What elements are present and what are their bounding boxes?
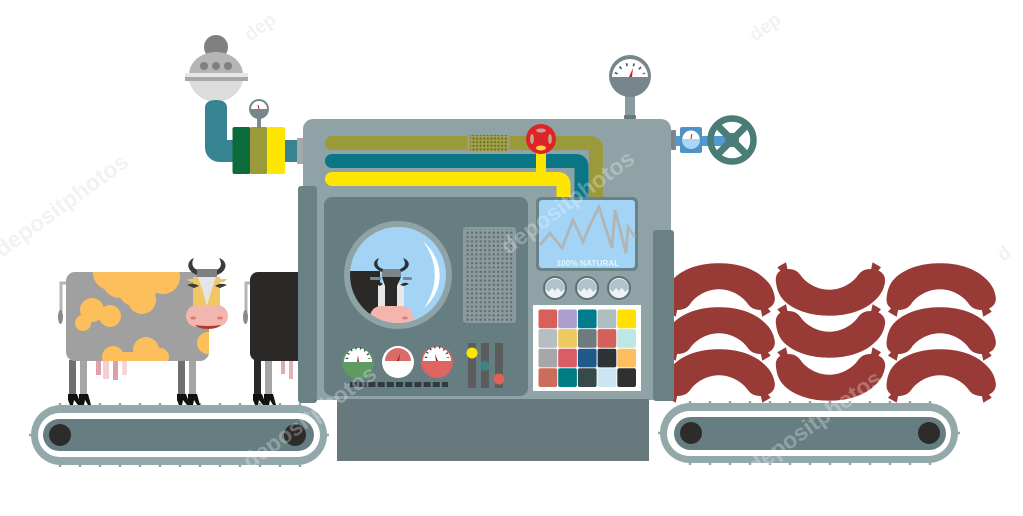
spotted cow: [58, 256, 228, 405]
watermark: overlay text: depositphotos: [238, 360, 381, 474]
tail: [58, 283, 66, 324]
screen caption: 100% NATURAL: [556, 258, 620, 268]
dial gauges: [342, 346, 453, 379]
legs: [68, 360, 200, 405]
watermark: overlay text: depositphotos: [743, 365, 886, 479]
black cow: [243, 272, 310, 405]
machine body: [303, 119, 671, 461]
watermark: depositphotos text: [0, 9, 1015, 266]
right conveyor belt: [658, 401, 960, 465]
speaker grille: [463, 227, 516, 323]
small gauge on inlet: [249, 99, 269, 128]
olive pipe: [332, 143, 596, 200]
slider controls: [466, 343, 504, 388]
watermark: depositphotos text: dep: [746, 9, 785, 46]
funnel hopper: [185, 35, 248, 102]
teal pipe: [332, 161, 582, 200]
indicator lights strip: [350, 382, 448, 387]
head: [186, 258, 228, 329]
porthole with cow: [340, 221, 452, 331]
left conveyor belt: [29, 403, 329, 467]
yellow pipe: [332, 150, 564, 200]
pipe filter mesh: [467, 135, 510, 151]
inlet pipe with colored couplers: [205, 100, 304, 174]
left side column: [298, 186, 317, 403]
red valve: [526, 124, 556, 154]
line chart: [540, 207, 635, 253]
sausages right column: [887, 263, 996, 403]
round knobs: [544, 277, 630, 299]
watermark: depositphotos text: dep: [241, 9, 280, 46]
right side column: [653, 230, 674, 401]
control panel: [324, 197, 528, 396]
body with spots: [66, 272, 209, 361]
sausages left column: [666, 263, 775, 403]
udder: [96, 358, 127, 380]
watermark: overlay text: [238, 145, 886, 479]
color button grid: [533, 305, 641, 391]
watermark: depositphotos text: d: [994, 242, 1015, 266]
right side valve wheel: [671, 118, 754, 162]
monitor screen: [536, 197, 638, 271]
sausages middle column: [776, 262, 885, 401]
watermark: overlay text: depositphotos: [496, 145, 639, 259]
top pressure gauge: [609, 55, 651, 119]
